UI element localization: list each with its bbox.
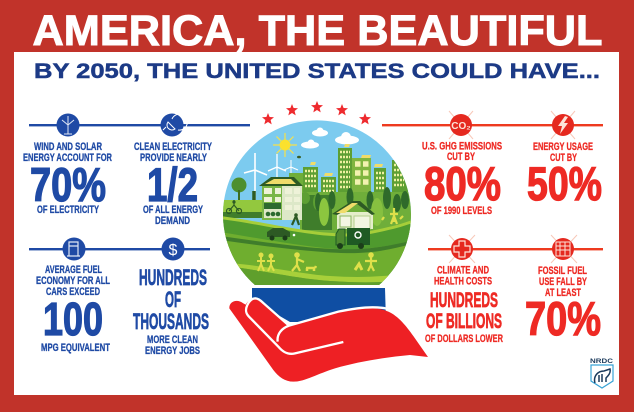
- globe stand: [252, 288, 386, 322]
- sun: [273, 133, 297, 157]
- stat: climate and health costs: OF BILLIONS: [426, 310, 502, 333]
- stat: fuel economy 100 mpg: 100: [43, 293, 103, 345]
- stat: climate and health costs: [425, 264, 503, 345]
- icon: plug: [160, 114, 187, 136]
- white content panel: [14, 52, 619, 395]
- stat: clean electricity 1/2: DEMAND: [155, 215, 190, 227]
- stat: GHG emissions 80%: U.S. GHG EMISSIONS: [422, 140, 502, 152]
- stat: climate and health costs: CLIMATE AND: [437, 264, 489, 276]
- title: AMERICA, THE BEAUTIFUL: [32, 7, 602, 55]
- stat: clean electricity 1/2: PROVIDE NEARLY: [140, 152, 207, 164]
- icon: health cross: [449, 235, 475, 263]
- stat: hundreds of thousands of jobs: OF: [165, 287, 181, 312]
- stat: climate and health costs: HUNDREDS: [430, 289, 498, 312]
- stat: fossil fuel 70%: USE FALL BY: [539, 276, 587, 288]
- icon: fuel pump: [62, 238, 86, 260]
- cyclist: [226, 200, 242, 214]
- stat: hundreds of thousands of jobs: MORE CLEAN: [147, 334, 198, 346]
- stat: wind and solar 70%: 70%: [30, 158, 106, 211]
- mid ground: [300, 192, 415, 237]
- stat: GHG emissions 80%: [422, 140, 502, 217]
- house with solar roof, right: [332, 201, 375, 229]
- yellow gardener: [382, 208, 403, 224]
- stat: fuel economy 100 mpg: ECONOMY FOR ALL: [36, 275, 110, 287]
- icon: CO2: CO₂: [451, 121, 471, 132]
- stat: clean electricity 1/2: 1/2: [147, 158, 198, 211]
- stat: hundreds of thousands of jobs: THOUSANDS: [133, 309, 209, 334]
- stat: fuel economy 100 mpg: [36, 264, 110, 354]
- house with solar roof, left: [259, 177, 303, 225]
- stat: energy usage 50%: [527, 141, 602, 210]
- stat: GHG emissions 80%: 80%: [424, 157, 501, 210]
- icon: dollar sign: $: [169, 242, 178, 259]
- icon: CO2: [449, 111, 473, 139]
- bird: [297, 156, 301, 158]
- people and dogs: [257, 253, 377, 271]
- trees: [232, 178, 409, 226]
- stat: wind and solar 70%: OF ELECTRICITY: [37, 204, 99, 216]
- pedestrian, background: [252, 191, 256, 200]
- globe illustration: [220, 120, 415, 290]
- stat: hundreds of thousands of jobs: [133, 265, 209, 357]
- stat: fossil fuel 70%: FOSSIL FUEL: [538, 265, 587, 277]
- stat: fuel economy 100 mpg: CARS EXCEED: [46, 286, 100, 298]
- stat: hundreds of thousands of jobs: ENERGY JOBS: [145, 345, 200, 357]
- stat: GHG emissions 80%: OF 1990 LEVELS: [431, 205, 492, 217]
- icon: factory fuel: [551, 235, 577, 263]
- stat: clean electricity 1/2: CLEAN ELECTRICITY: [134, 141, 212, 153]
- icon: lightning bolt: [551, 111, 575, 139]
- panel: left top row stats: [23, 114, 250, 227]
- stat: wind and solar 70%: WIND AND SOLAR: [34, 141, 102, 153]
- hand: [229, 298, 428, 382]
- recycling truck: [336, 228, 370, 249]
- stat: climate and health costs: HEALTH COSTS: [434, 276, 492, 288]
- left bottom divider line: [29, 248, 210, 250]
- stat: wind and solar 70%: ENERGY ACCOUNT FOR: [23, 152, 112, 164]
- electric car: [267, 228, 295, 240]
- sky: [220, 120, 415, 290]
- stat: clean electricity 1/2: [134, 141, 212, 227]
- stat: fossil fuel 70%: 70%: [525, 292, 601, 345]
- panel: right top row stats: [382, 111, 603, 217]
- panel: right bottom row stats: [425, 235, 603, 345]
- stat: clean electricity 1/2: OF ALL ENERGY: [143, 204, 203, 216]
- stat: fuel economy 100 mpg: MPG EQUIVALENT: [41, 342, 110, 354]
- clouds: [301, 128, 359, 148]
- left top divider line: [29, 124, 250, 126]
- wind turbines: [244, 153, 298, 200]
- icon: dollar sign: [162, 238, 184, 260]
- stat: fuel economy 100 mpg: AVERAGE FUEL: [45, 264, 102, 276]
- stat: energy usage 50%: 50%: [527, 157, 602, 210]
- panel: left bottom row stats: [29, 238, 210, 357]
- subtitle: BY 2050, THE UNITED STATES COULD HAVE...: [34, 59, 600, 83]
- stat: fossil fuel 70%: AT LEAST: [545, 287, 581, 299]
- stat: wind and solar 70%: [23, 141, 112, 216]
- NRDC logo: [590, 359, 614, 388]
- right bottom divider line: [428, 248, 603, 250]
- stat: energy usage 50%: CUT BY: [550, 152, 577, 164]
- stat: climate and health costs: OF DOLLARS LOWER: [425, 333, 503, 345]
- right top divider line: [382, 124, 603, 126]
- city buildings: [289, 144, 408, 192]
- NRDC logo: NRDC: [590, 359, 614, 365]
- stat: fossil fuel 70%: [525, 265, 601, 345]
- stat: energy usage 50%: ENERGY USAGE: [533, 141, 593, 153]
- stat: hundreds of thousands of jobs: HUNDREDS: [139, 265, 207, 290]
- icon: wind turbine and solar: [56, 114, 80, 136]
- stat: GHG emissions 80%: CUT BY: [447, 151, 475, 163]
- main ground bands: [223, 216, 411, 285]
- stars: [262, 101, 371, 124]
